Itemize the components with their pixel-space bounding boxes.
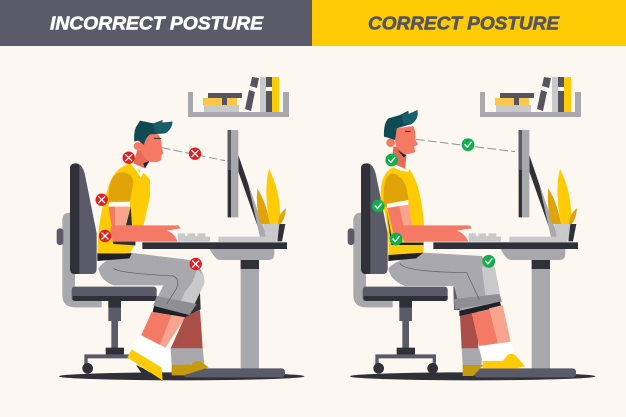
person: upright (correct) [381, 110, 525, 376]
header: correct posture: CORRECT POSTURE [368, 14, 560, 34]
workstation: left (chair, desk, monitor, plant) [57, 130, 304, 380]
workstation: right (chair, desk, monitor, plant) [348, 130, 595, 380]
person: slouching (incorrect) [97, 120, 225, 381]
header: incorrect posture [0, 0, 312, 46]
red error markers [96, 148, 202, 270]
header: incorrect posture: INCORRECT POSTURE [50, 14, 264, 34]
header: correct posture [312, 0, 626, 46]
shelf with books: left [188, 77, 289, 117]
green check markers [372, 138, 495, 268]
shelf with books: right [480, 77, 581, 117]
